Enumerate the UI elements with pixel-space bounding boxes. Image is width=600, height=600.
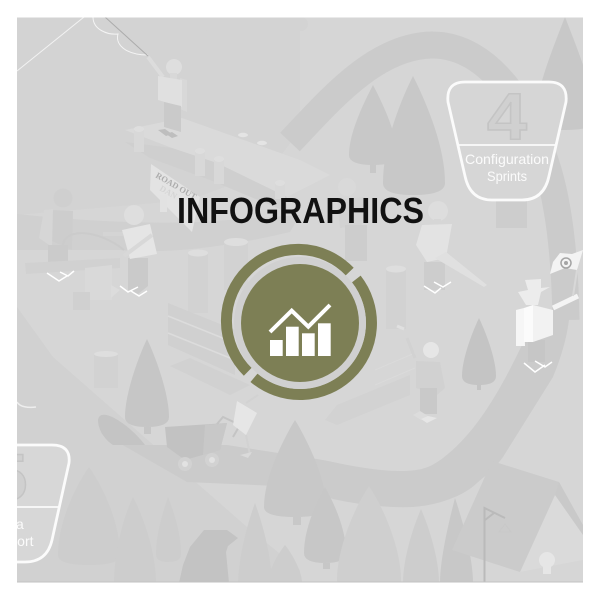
icon: growth chart badge [226, 249, 371, 395]
person: back centre [345, 225, 367, 261]
badge number 4: 4 [487, 79, 527, 153]
person: hammer worker [396, 325, 439, 423]
fishing line and cloud outline [17, 17, 148, 71]
person: right sawyer [46, 222, 157, 297]
person: left sawyer [48, 211, 73, 262]
tree: bottom centre large [264, 420, 326, 525]
badge label second line: Sprints [487, 168, 527, 184]
person: flag bearer [516, 279, 578, 372]
tree: bottom centre small [304, 496, 344, 569]
tree: right middle [462, 318, 496, 390]
flag with logo [550, 250, 583, 296]
trend line [270, 305, 330, 332]
badge: step 4 configuration sprints [448, 79, 566, 200]
bar chart [270, 323, 331, 356]
lumber stack right [325, 353, 415, 425]
road: lower curve [154, 320, 569, 507]
road: upper arc [290, 45, 566, 320]
road closed sign: ROAD OUT [154, 170, 199, 202]
lamp post [484, 506, 506, 582]
segmented outer ring [226, 249, 371, 395]
dock [134, 126, 267, 162]
lumber stack [168, 303, 250, 395]
tree: lower left [125, 339, 169, 434]
left curve mark [17, 402, 36, 407]
tent [464, 464, 583, 572]
tree: upper right [542, 18, 583, 130]
bear silhouette [179, 530, 238, 583]
wheelbarrow [165, 417, 240, 471]
tree stumps [224, 238, 248, 244]
person: wheelbarrow pusher [233, 401, 257, 458]
road closed sign: DAN [158, 183, 180, 201]
tree: right of badge trunk [496, 200, 527, 228]
title: INFOGRAPHICS [177, 190, 424, 231]
tree: bottom row dark [440, 498, 473, 583]
tree: bottom row light [337, 486, 401, 590]
tree: small centre [349, 86, 392, 173]
bulb figure [539, 552, 555, 574]
badge: step 5 data support [0, 440, 69, 562]
road closed sign [150, 164, 200, 232]
person: fisher [148, 57, 187, 138]
inner disc [241, 264, 359, 382]
log and saw [25, 233, 124, 310]
tree: bottom row narrow [403, 509, 439, 583]
badge label: Configuration [465, 151, 549, 167]
person: right saw holder [416, 224, 486, 294]
faint trees: lower left [248, 504, 302, 582]
road: left tongue [98, 415, 145, 445]
tree: tall centre [383, 76, 445, 195]
